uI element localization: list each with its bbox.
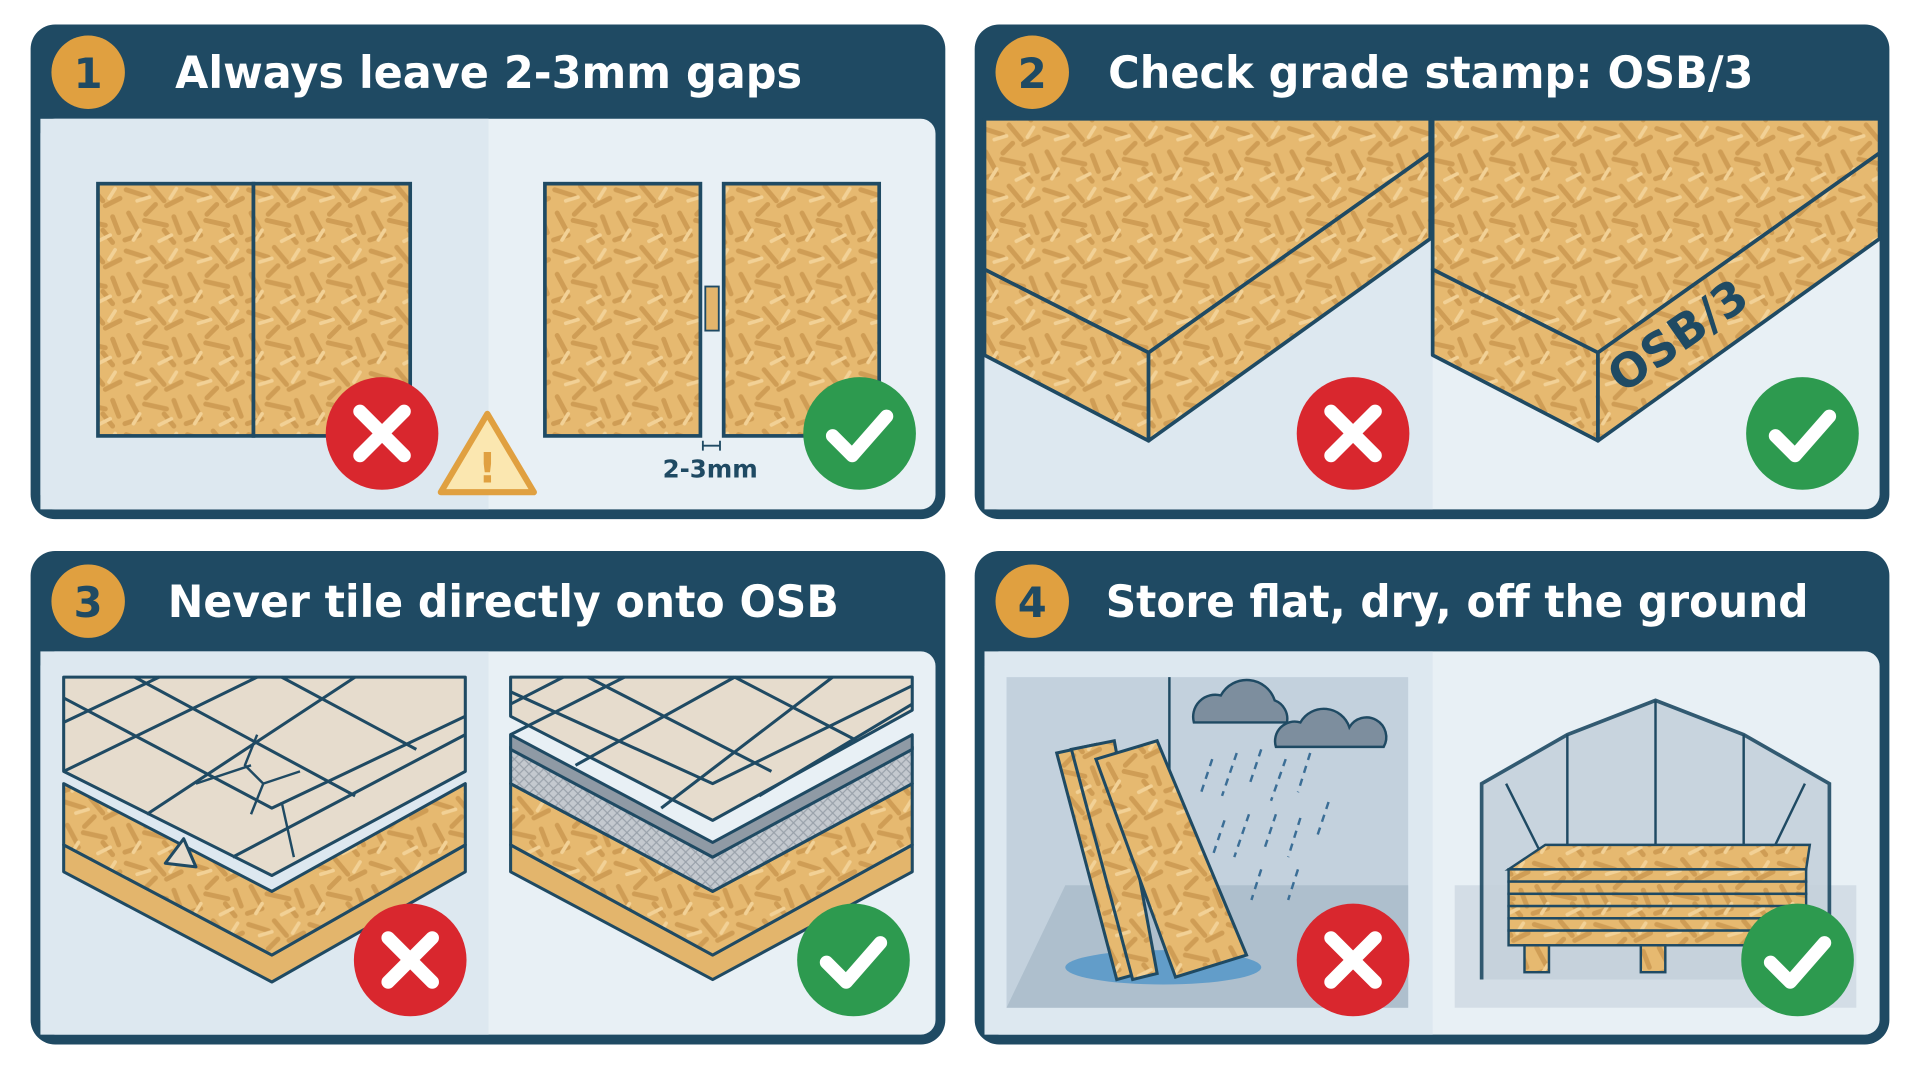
- panel: grade stamp: [975, 24, 1889, 519]
- wrong: boards touching: [98, 184, 410, 436]
- number badge 1: [51, 36, 125, 109]
- number badge 1: 1: [74, 49, 103, 98]
- icon: warning: [441, 414, 534, 492]
- panel: storage: [975, 551, 1889, 1044]
- dry shelter: [1455, 700, 1856, 1008]
- number badge 2: [996, 36, 1069, 109]
- icon: check: [803, 377, 916, 490]
- panel: tiles: [31, 551, 945, 1044]
- right: boards with gap: [545, 184, 879, 451]
- heading 1: Always leave 2-3mm gaps: [175, 48, 802, 99]
- board stamped OSB/3: [1433, 119, 1880, 441]
- number badge 3: 3: [74, 578, 103, 627]
- icon: warning: !: [478, 443, 497, 492]
- tiles with membrane: [511, 677, 912, 980]
- gap label: 2-3mm: [663, 455, 758, 484]
- icon: red x: [326, 377, 438, 490]
- number badge 4: [996, 564, 1069, 638]
- wet scene: [1007, 677, 1408, 1008]
- heading 2: Check grade stamp: OSB/3: [1108, 48, 1753, 99]
- heading 4: Store flat, dry, off the ground: [1106, 577, 1809, 628]
- stamp text: OSB/3: [1598, 269, 1758, 403]
- number badge 4: 4: [1018, 578, 1047, 627]
- number badge 2: 2: [1018, 49, 1047, 98]
- heading 3: Never tile directly onto OSB: [168, 577, 839, 628]
- cracked tiles on osb: [64, 677, 465, 982]
- board unstamped: [984, 119, 1430, 441]
- panel: gaps: [31, 24, 945, 519]
- number badge 3: [51, 564, 125, 638]
